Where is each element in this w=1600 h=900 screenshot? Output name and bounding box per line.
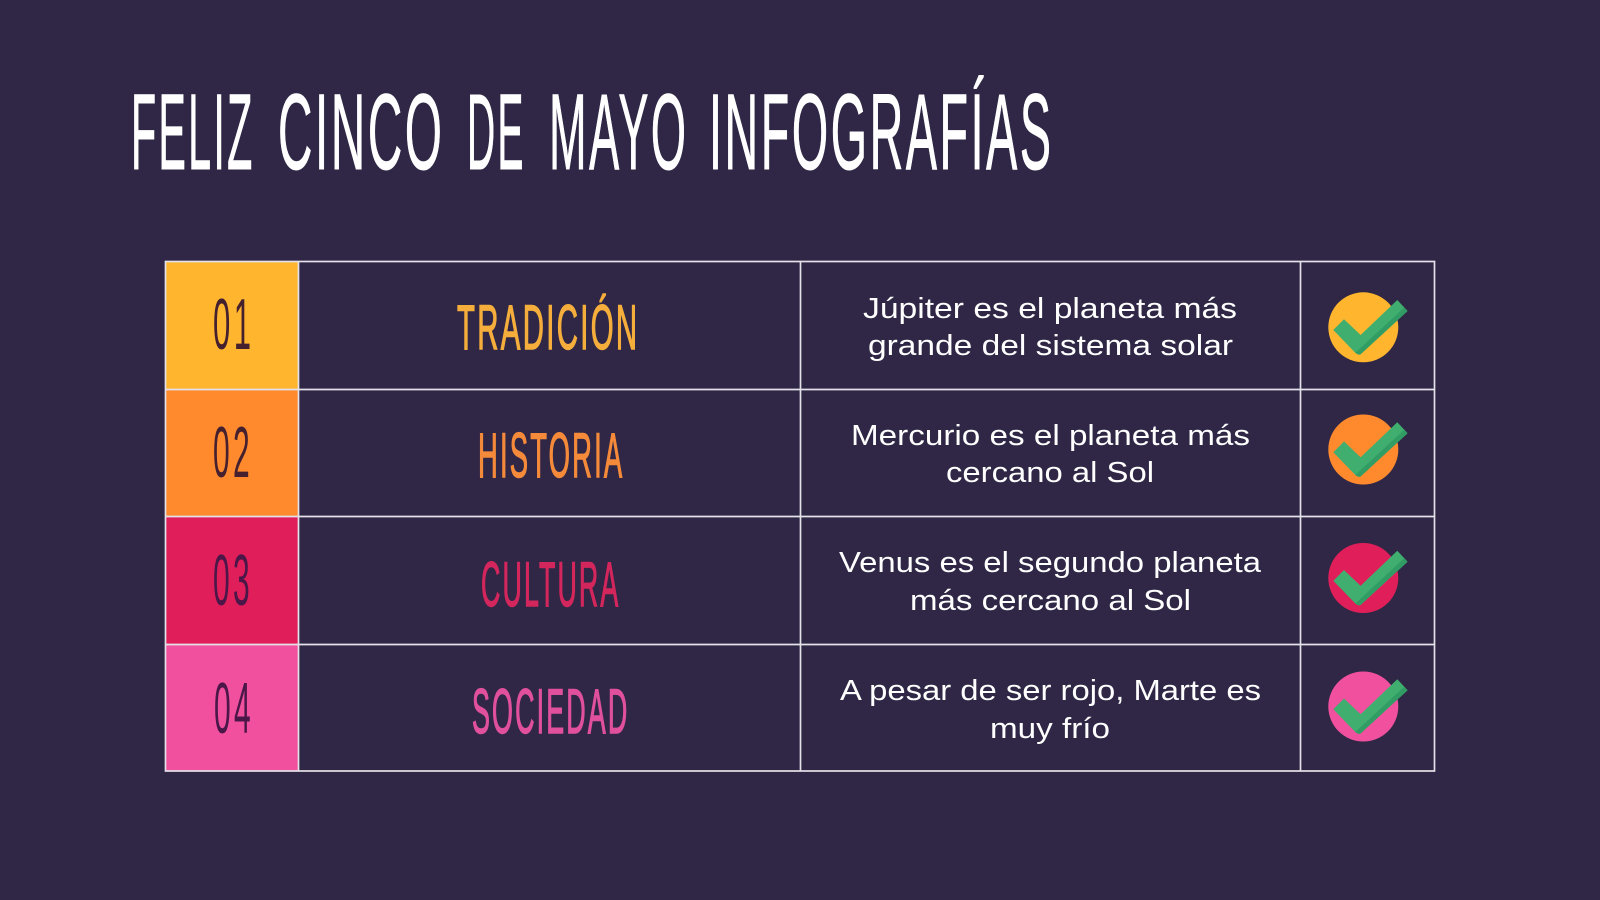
panel: table	[165, 261, 1435, 771]
description: Mercurio: cercano al Sol	[946, 457, 1154, 489]
table grid	[165, 261, 1435, 771]
panel: table: CULTURA	[481, 550, 620, 620]
number cell 03: 03	[213, 541, 253, 621]
number cell 03	[165, 516, 298, 644]
panel: table: SOCIEDAD	[472, 677, 629, 747]
title: DE	[467, 71, 526, 192]
icon: check orange	[1328, 414, 1408, 484]
description: Venus: más cercano al Sol	[910, 585, 1191, 617]
number cell 01	[165, 261, 298, 389]
panel: table: HISTORIA	[478, 421, 624, 491]
title: FELIZ	[131, 71, 254, 192]
number cell 02: 02	[213, 413, 253, 493]
description: Mercurio: Mercurio es el planeta más	[851, 420, 1250, 452]
number cell 01: 01	[213, 285, 254, 365]
description: Júpiter	[863, 293, 1237, 362]
number cell 04: 04	[214, 669, 254, 749]
description: Marte: muy frío	[990, 713, 1110, 745]
title	[131, 71, 1054, 192]
text: INFOGRAFÍAS	[709, 71, 1054, 192]
description: Marte	[840, 675, 1261, 745]
icon: check yellow	[1328, 292, 1408, 362]
description: Marte: A pesar de ser rojo, Marte es	[840, 675, 1261, 707]
description: Júpiter: Júpiter es el planeta más	[863, 293, 1237, 325]
number cell 04	[165, 644, 298, 771]
description: Venus	[839, 547, 1262, 617]
description: Venus: Venus es el segundo planeta	[839, 547, 1262, 579]
description: Mercurio	[851, 420, 1250, 489]
panel: table: TRADICIÓN	[457, 293, 639, 363]
title: MAYO	[549, 71, 688, 192]
icon: check red	[1328, 543, 1408, 613]
number cell 02	[165, 389, 298, 516]
icon: check pink	[1328, 672, 1408, 742]
title: CINCO	[278, 71, 444, 192]
description: Júpiter: grande del sistema solar	[868, 330, 1233, 362]
